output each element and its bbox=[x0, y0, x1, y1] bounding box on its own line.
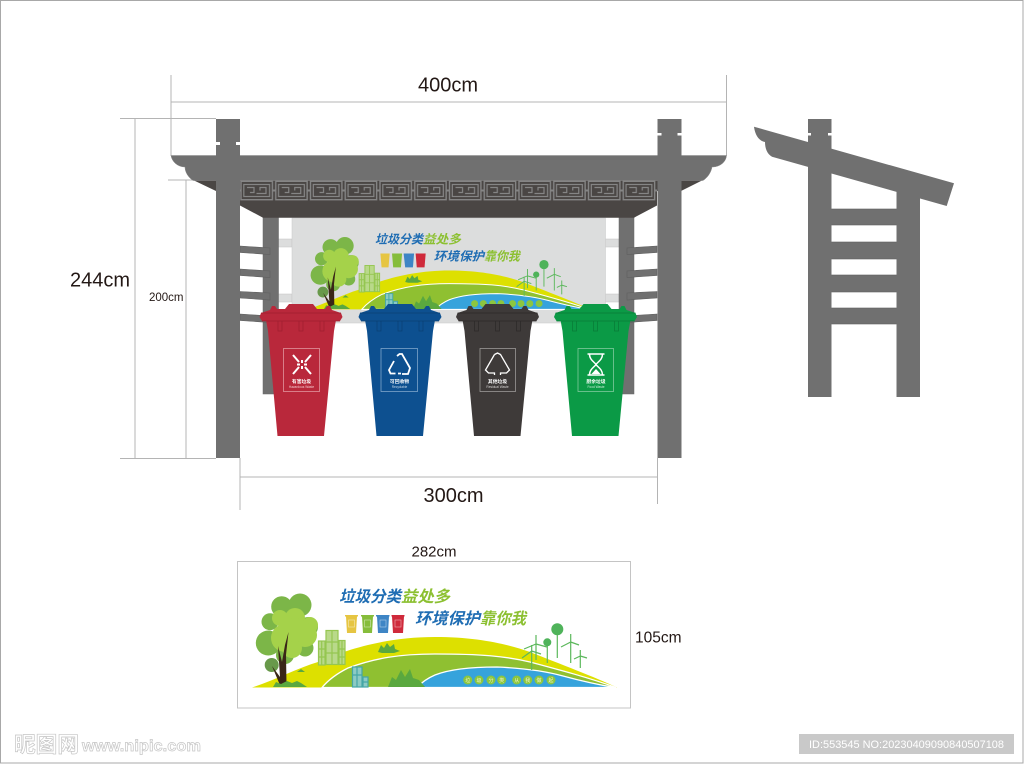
slogan badges: 类 bbox=[499, 677, 504, 684]
bin: blue recyclable bbox=[358, 304, 442, 436]
dimension lines bbox=[120, 75, 726, 510]
heading: slogan: 环境保护 bbox=[415, 610, 482, 628]
label: 400cm: 400cm bbox=[418, 74, 478, 96]
side white panels bbox=[278, 218, 619, 323]
bin: green food waste bbox=[554, 304, 637, 436]
label: 105cm: 105cm bbox=[635, 630, 682, 646]
slogan badges: 垃 bbox=[465, 677, 470, 684]
main post right bbox=[658, 119, 682, 458]
slogan badges: 做 bbox=[536, 677, 542, 684]
slogan badges: 分 bbox=[488, 677, 494, 684]
label: 282cm: 282cm bbox=[411, 544, 457, 560]
banner artwork on pavilion: 靠你我 bbox=[484, 250, 521, 263]
watermark: logo bbox=[14, 733, 201, 757]
slanted roof bbox=[754, 127, 954, 206]
panel: banner artwork flat view bbox=[238, 562, 630, 708]
bin: green food waste: Food Waste bbox=[587, 385, 605, 389]
label: 244cm: 244cm bbox=[70, 270, 130, 292]
label: 300cm: 300cm bbox=[423, 485, 484, 507]
inner post right bbox=[619, 208, 634, 394]
watermark: logo: www.nipic.com bbox=[81, 738, 201, 755]
back post bbox=[896, 190, 920, 397]
heading: slogan bbox=[339, 588, 528, 628]
bin: green food waste: 厨余垃圾 bbox=[586, 378, 606, 385]
slogan badges: 从 bbox=[514, 678, 519, 684]
bin: dark residual: 其他垃圾 bbox=[488, 378, 507, 385]
tree bbox=[256, 594, 318, 687]
green buildings bbox=[318, 630, 345, 665]
roof underside bbox=[193, 180, 703, 218]
label: 200cm: 200cm bbox=[149, 292, 184, 304]
bin: blue recyclable: Recyclable bbox=[392, 385, 408, 389]
small bin icons bbox=[345, 615, 404, 633]
bin: red hazardous: 有害垃圾 bbox=[292, 378, 311, 385]
front post bbox=[808, 119, 832, 397]
teal buildings bbox=[352, 667, 368, 687]
watermark: logo: 昵图网 bbox=[14, 733, 79, 757]
main post left bbox=[216, 119, 240, 458]
bin: blue recyclable: 可回收物 bbox=[390, 378, 409, 385]
heading: slogan: 靠你我 bbox=[480, 610, 528, 628]
banner artwork on pavilion: 垃圾分类 bbox=[375, 233, 425, 247]
bin: red hazardous bbox=[260, 304, 342, 436]
side rails bbox=[240, 246, 657, 322]
banner artwork on pavilion bbox=[308, 233, 590, 309]
front elevation: pavilion structure bbox=[171, 119, 726, 458]
lattice frieze bbox=[240, 180, 657, 200]
hills bbox=[252, 637, 617, 688]
wind turbines and round trees bbox=[522, 623, 587, 670]
slogan badges: 我 bbox=[525, 677, 530, 684]
banner frame bbox=[238, 562, 630, 708]
slogan badges: 起 bbox=[548, 678, 554, 684]
grass tufts bbox=[378, 643, 425, 687]
bin: dark residual: Residual Waste bbox=[486, 385, 509, 389]
inner post left bbox=[263, 208, 278, 394]
heading: slogan: 益处多 bbox=[401, 588, 451, 606]
side elevation bbox=[754, 119, 954, 397]
slogan badges: 圾 bbox=[476, 677, 482, 684]
panel: mounted banner background bbox=[292, 218, 606, 323]
bin: red hazardous: Hazardous Waste bbox=[289, 385, 314, 389]
slogan badges bbox=[463, 676, 556, 684]
roof beam bbox=[171, 156, 726, 180]
heading: slogan: 垃圾分类 bbox=[339, 588, 403, 606]
banner artwork on pavilion: 益处多 bbox=[423, 233, 462, 247]
slats bbox=[831, 209, 897, 324]
watermark: image id bbox=[799, 734, 1014, 754]
bin: dark residual bbox=[456, 304, 539, 436]
banner artwork on pavilion: 环境保护 bbox=[434, 250, 486, 263]
watermark: image id: ID:553545 NO:20230409090840507108 bbox=[809, 739, 1004, 751]
